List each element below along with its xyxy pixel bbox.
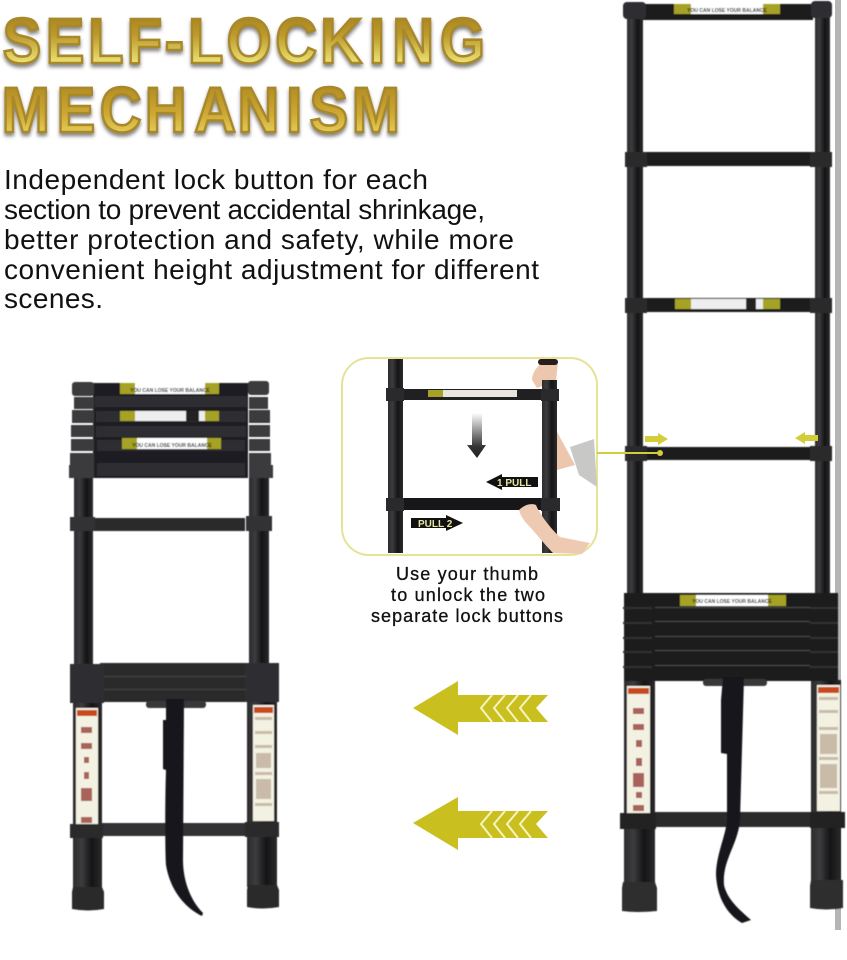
- right ladder bottom rung: [620, 812, 845, 829]
- right ladder rung 2: [625, 152, 832, 167]
- callout rounded frame: [342, 358, 597, 555]
- right ladder rails: [624, 15, 841, 885]
- description text: [4, 164, 539, 314]
- right ladder feet: [622, 880, 843, 912]
- left ladder safety stickers: [76, 705, 274, 825]
- left ladder rung labels: YOU CAN LOSE YOUR BALANCE: [132, 443, 212, 449]
- callout caption: to unlock the two: [391, 585, 545, 605]
- left retracted ladder: [69, 381, 279, 916]
- right ladder collapsed rung stack: YOU CAN LOSE YOUR BALANCE: [692, 599, 772, 605]
- description text: scenes.: [4, 283, 103, 314]
- icon: lower hand: [519, 504, 590, 554]
- callout caption: [371, 564, 563, 626]
- right ladder bracket and strap: [703, 677, 767, 923]
- right extended ladder: [620, 1, 845, 923]
- icon: upper arm and sleeve: [532, 360, 597, 487]
- title: [2, 5, 485, 146]
- callout caption: separate lock buttons: [371, 606, 563, 626]
- left ladder rung labels: YOU CAN LOSE YOUR BALANCE: [130, 388, 210, 394]
- callout leader line and dot: [597, 450, 663, 456]
- description text: section to prevent accidental shrinkage,: [4, 194, 485, 225]
- small yellow arrows: [645, 432, 818, 445]
- left ladder bracket and strap: [146, 699, 206, 916]
- description text: convenient height adjustment for different: [4, 254, 539, 285]
- callout caption: Use your thumb: [396, 564, 538, 584]
- pull 1 arrow: 1 PULL: [497, 478, 531, 489]
- right ladder rung 3 with label: [625, 298, 832, 313]
- pull 1 arrow: [486, 474, 538, 490]
- pull 2 arrow: PULL 2: [418, 519, 453, 530]
- left ladder feet: [72, 885, 279, 910]
- title: MECHANISM: [2, 74, 400, 146]
- left ladder collapsed rung stack: [69, 381, 273, 478]
- pull 2 arrow: [411, 515, 463, 531]
- left ladder rails: [73, 470, 277, 887]
- left ladder lower stack: [70, 663, 279, 703]
- lower big arrow: [413, 797, 548, 850]
- grey pole: [835, 0, 841, 930]
- left ladder bottom rung: [70, 822, 279, 838]
- left ladder rung labels: [120, 383, 221, 449]
- upper big arrow: [413, 681, 548, 735]
- right ladder top rung: [623, 1, 832, 20]
- description text: Independent lock button for each: [4, 164, 428, 195]
- left ladder middle rung: [70, 516, 272, 531]
- right ladder safety stickers: [627, 685, 840, 815]
- icon: down arrow: [467, 413, 486, 458]
- right ladder top rung: YOU CAN LOSE YOUR BALANCE: [687, 8, 767, 14]
- right ladder collapsed rung stack: [623, 593, 838, 681]
- right ladder rung 4: [625, 446, 832, 461]
- title: SELF-LOCKING: [3, 5, 485, 77]
- callout panel: lock button instructions: [342, 358, 597, 555]
- description text: better protection and safety, while more: [4, 224, 514, 255]
- callout ladder section: [386, 359, 560, 553]
